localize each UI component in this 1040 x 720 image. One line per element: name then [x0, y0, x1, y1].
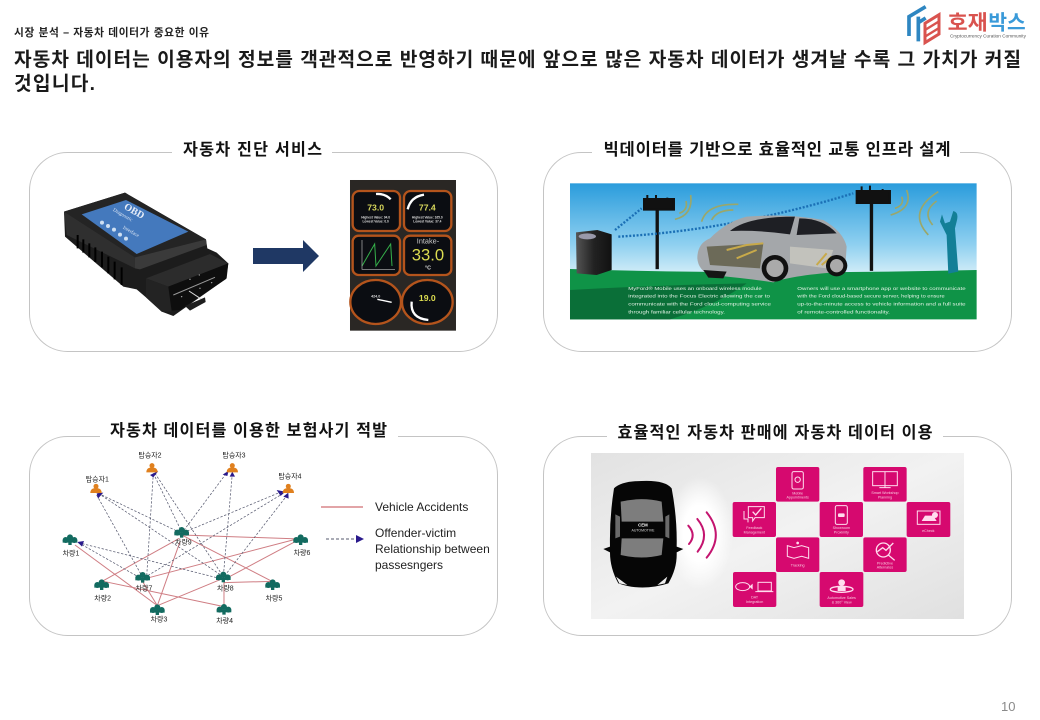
node labels: [63, 450, 310, 625]
tile: Showroom Proximity: [820, 502, 863, 537]
gauge dashboard screenshot: 73.0: [367, 203, 384, 213]
tile: Predictive Alternates: Predictive: [877, 561, 893, 565]
logo: 호재박스: Cryptocurrency Curation Community: [950, 33, 1027, 38]
node labels: 탑승자3: [222, 450, 246, 459]
Ford connected car illustration: [570, 183, 977, 319]
legend: Offender-victim: [375, 526, 456, 540]
node labels: 차량4: [216, 616, 233, 625]
legend: Relationship between: [375, 542, 490, 556]
legend: Vehicle Accidents: [375, 500, 468, 514]
icon: top-down car with signal: [603, 477, 733, 590]
gauge dashboard screenshot: [350, 180, 456, 331]
tile: Smart Workshop Planning: [863, 467, 907, 502]
node labels: 차량6: [294, 548, 310, 557]
gauge dashboard screenshot: °C: [425, 265, 431, 271]
data links: [615, 193, 853, 237]
node labels: 차량7: [136, 584, 152, 593]
icon: OBD dongle: [64, 193, 228, 316]
gauge dashboard screenshot: Lowest Value: 37.4: [413, 220, 442, 224]
caption text: communicate with the Ford cloud-computing service: [628, 302, 771, 308]
node labels: 차량9: [175, 538, 192, 547]
icon: top-down car with signal: CEM: [638, 523, 648, 528]
caption text: integrated into the Focus Electric allowing the car to: [628, 294, 770, 300]
tile: DAT Integration: Integration: [746, 600, 763, 604]
logo: 호재박스: 박스: [988, 11, 1026, 34]
icon: top-down car with signal: AUTOMOTIVE: [632, 528, 655, 532]
tile: DAT Integration: [733, 572, 776, 607]
gauge dashboard screenshot: Highest Value: 165.0: [412, 215, 443, 219]
tile: Smart Workshop Planning: Planning: [878, 495, 892, 499]
caption text: with the Ford cloud-based secure server, helping to ensure: [797, 294, 945, 300]
panel: 교통 인프라 설계: [544, 140, 1012, 352]
relationship links: [78, 471, 287, 579]
page number: 10: [1001, 699, 1015, 714]
caption text: Owners will use a smartphone app or website to communicate: [797, 286, 966, 292]
arrowheads: [77, 471, 289, 547]
node labels: 차량1: [63, 548, 79, 557]
accident links: [75, 535, 301, 607]
node labels: 차량3: [151, 615, 167, 624]
tile: Mobile Appointments: [776, 467, 819, 502]
caption text: of remote-controlled functionality.: [797, 309, 890, 315]
caption text: MyFord® Mobile uses an onboard wireless module: [628, 285, 762, 292]
logo: 호재박스: 호재: [948, 11, 988, 34]
gauge dashboard screenshot: Lowest Value: 0.0: [363, 220, 389, 224]
tile: Predictive Alternates: Alternates: [877, 566, 893, 570]
node labels: 탑승자2: [138, 450, 162, 459]
tile: Feedback Management: [733, 502, 776, 537]
person: [940, 211, 958, 274]
tile: Feedback Management: Feedback: [746, 526, 763, 530]
node labels: 차량2: [94, 594, 111, 603]
headline: 것입니다.: [14, 73, 95, 95]
passenger nodes: [90, 463, 294, 493]
tile: Showroom Proximity: Showroom: [833, 526, 850, 530]
node labels: 탑승자1: [86, 475, 109, 484]
vehicle nodes: [63, 527, 308, 615]
tile: Showroom Proximity: Proximity: [834, 530, 849, 534]
section label: 시장 분석 – 자동차 데이터가 중요한 이유: [14, 26, 209, 39]
icon: OBD dongle: Diagnostic: [112, 208, 134, 224]
panel: 자동차 판매: [544, 424, 1012, 636]
panel heading: car sales: 효율적인 자동차 판매에 자동차 데이터 이용: [618, 424, 933, 442]
panel heading: diagnostics: 자동차 진단 서비스: [183, 141, 322, 159]
network graph: [63, 450, 310, 625]
tile: Automotive Sales: Automotive Sales: [827, 596, 856, 600]
tile: Feedback Management: Management: [744, 530, 765, 534]
gauge dashboard screenshot: Intake-: [417, 237, 440, 246]
legend: passesngers: [375, 558, 443, 572]
logo: 호재박스: [909, 7, 1027, 43]
gauge dashboard screenshot: 77.4: [419, 203, 436, 213]
icon: OBD dongle: Interface: [122, 226, 140, 239]
tile: Tracking: Tracking: [791, 564, 805, 568]
gauge dashboard screenshot: Highest Value: 94.0: [361, 215, 390, 219]
tile: Tracking: [776, 537, 819, 572]
signal waves: [675, 190, 938, 235]
headline: 자동차 데이터는 이용자의 정보를 객관적으로 반영하기 때문에 앞으로 많은 자동차 데이터가 생겨날 수록 그 가치가 커질: [14, 49, 1021, 71]
arrow: dongle to gauges: [253, 240, 319, 272]
CEM image background: [591, 453, 964, 619]
tile: Smart Workshop Planning: Smart Workshop: [871, 491, 899, 495]
server: [576, 230, 612, 275]
tile: eCheck: [907, 502, 950, 537]
legend: [321, 500, 490, 572]
logo mark: [909, 7, 939, 43]
tile: Predictive Alternates: [863, 537, 907, 572]
tile: Automotive Sales: & 360° View: [832, 600, 852, 604]
panel: 보험사기 적발: [30, 422, 498, 636]
caption text: through familiar cellular technology.: [628, 309, 725, 315]
node labels: 차량8: [217, 584, 234, 593]
caption text: [628, 285, 966, 315]
headline: [14, 49, 1021, 95]
tile: eCheck: eCheck: [922, 529, 935, 533]
node labels: 탑승자4: [278, 472, 302, 481]
tile: Mobile Appointments: Mobile: [792, 491, 803, 495]
node labels: 차량5: [266, 594, 282, 603]
cell towers: [644, 186, 890, 271]
tile: DAT Integration: DAT: [751, 596, 759, 600]
panel heading: infrastructure: 빅데이터를 기반으로 효율적인 교통 인프라 설계: [604, 140, 950, 159]
car: [697, 216, 847, 282]
gauge dashboard screenshot: 424.0: [371, 294, 380, 298]
gauge dashboard screenshot: 33.0: [412, 245, 444, 264]
icon: OBD dongle: OBD: [122, 201, 146, 222]
service tiles: [733, 467, 950, 607]
tile: Mobile Appointments: Appointments: [786, 496, 809, 500]
tile: Automotive Sales: [820, 572, 863, 607]
caption text: up-to-the-minute access to vehicle information and a full suite: [797, 302, 966, 308]
gauge dashboard screenshot: 19.0: [419, 293, 436, 303]
panel heading: insurance fraud: 자동차 데이터를 이용한 보험사기 적발: [110, 422, 387, 440]
panel: 자동차 진단 서비스: [30, 140, 498, 352]
